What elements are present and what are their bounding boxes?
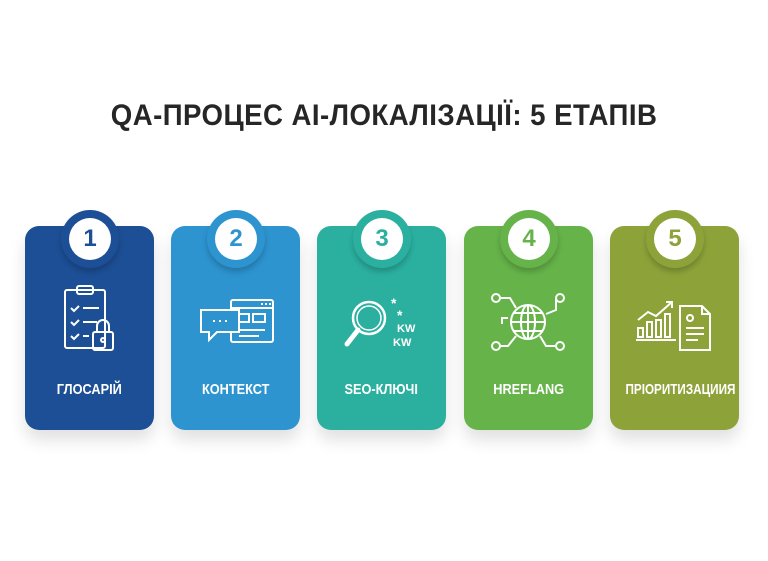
panel: seo <box>317 226 446 430</box>
badge 1: 1 <box>83 225 97 252</box>
icon: chart and document <box>636 301 711 351</box>
badge 5: 5 <box>668 225 682 252</box>
badge 3: 3 <box>375 225 389 252</box>
panel: context <box>171 226 300 430</box>
icon: magnifier kw: * <box>391 295 397 311</box>
badge 2: 2 <box>229 225 243 252</box>
badge 4: 4 <box>522 225 536 252</box>
badge 4 <box>500 210 558 268</box>
icon: globe network <box>491 293 565 351</box>
panel: prioritization <box>610 226 739 430</box>
icon: magnifier kw <box>344 295 416 349</box>
badge 3 <box>353 210 411 268</box>
label: ГЛОСАРІЙ <box>57 381 122 398</box>
icon: chat and window <box>200 299 274 343</box>
icon: clipboard lock <box>64 285 114 351</box>
icon: magnifier kw: * <box>397 307 403 323</box>
panel: glossary <box>25 226 154 430</box>
label: HREFLANG <box>493 381 564 398</box>
badge 2 <box>207 210 265 268</box>
title: QA-ПРОЦЕС AI-ЛОКАЛІЗАЦІЇ: 5 ЕТАПІВ <box>111 99 657 132</box>
icon: magnifier kw: KW <box>393 337 412 349</box>
icon: magnifier kw: KW <box>397 323 416 335</box>
label: ПРІОРИТИЗАЦИИЯ <box>625 381 735 398</box>
badge 5 <box>646 210 704 268</box>
label: SEO-КЛЮЧІ <box>345 381 418 398</box>
panel: hreflang <box>464 226 593 430</box>
label: КОНТЕКСТ <box>202 381 269 398</box>
badge 1 <box>61 210 119 268</box>
